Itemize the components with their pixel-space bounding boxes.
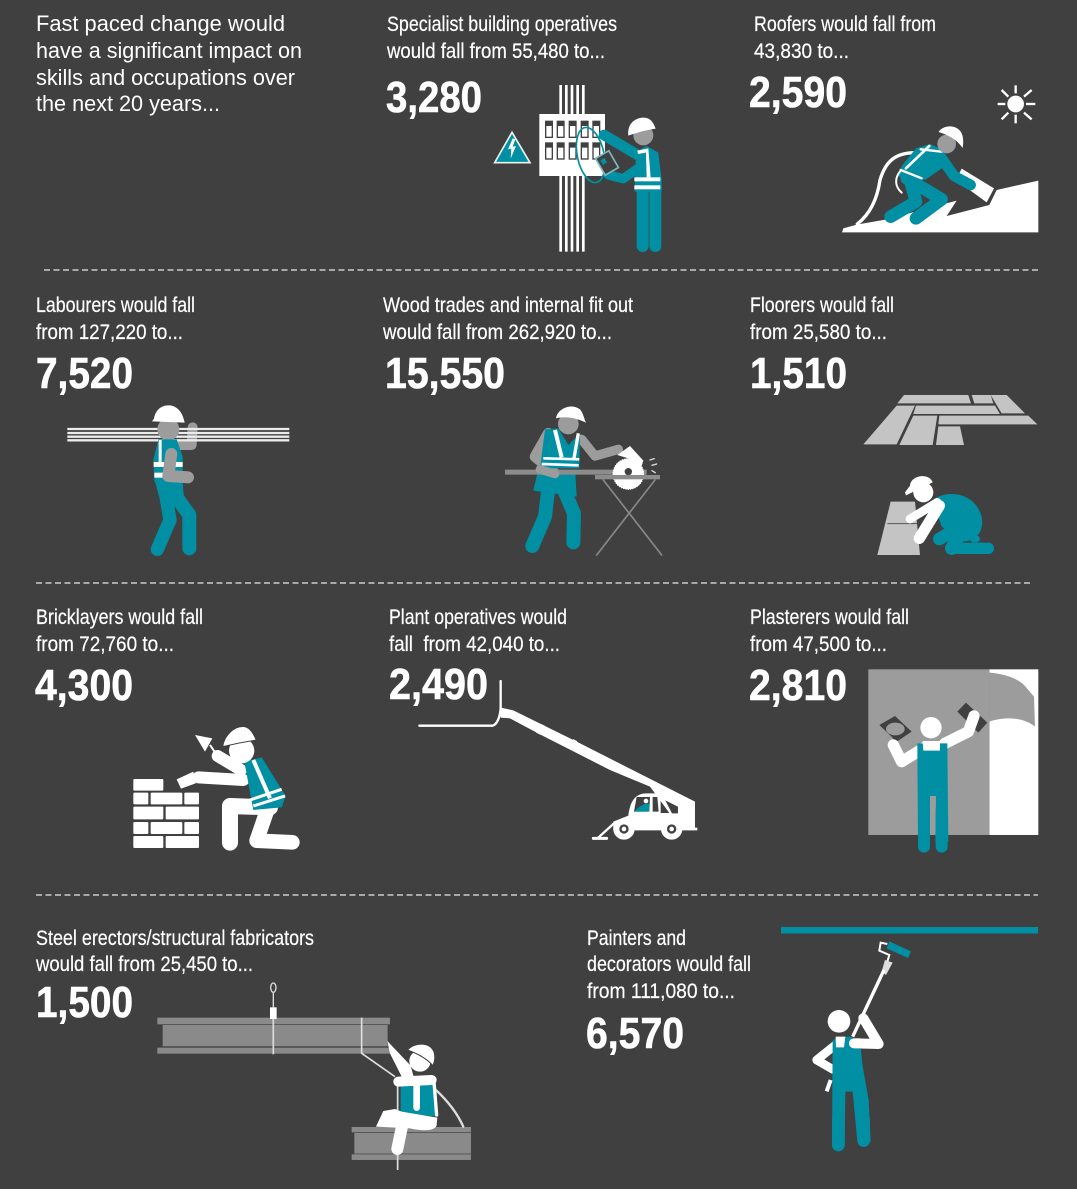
panel: steel erectors <box>35 927 471 1170</box>
heading: wood trades: Wood trades and internal fit out <box>383 294 633 317</box>
heading: roofers: Roofers would fall from <box>754 13 936 36</box>
panel: roofers <box>749 13 1038 232</box>
heading: steel erectors: would fall from 25,450 to... <box>35 953 253 976</box>
heading: plant operatives <box>389 606 567 656</box>
heading: plasterers: from 47,500 to... <box>750 633 887 656</box>
heading: painters and decorators: decorators would fall <box>587 953 751 976</box>
heading: floorers: Floorers would fall <box>750 294 894 317</box>
intro text: skills and occupations over <box>36 65 295 90</box>
panel: wood trades <box>382 294 662 555</box>
panel: specialist building operatives <box>386 13 662 252</box>
icon: sun <box>998 85 1035 123</box>
number: 1,500: 1,500 <box>36 978 133 1027</box>
number: 7,520: 7,520 <box>36 349 133 398</box>
heading: floorers: from 25,580 to... <box>750 321 887 344</box>
number: 1,510: 1,510 <box>750 349 847 398</box>
heading: specialist building operatives <box>386 13 617 63</box>
heading: plant operatives: Plant operatives would <box>389 606 567 629</box>
number: 15,550: 15,550 <box>385 349 505 398</box>
icon: floorer kneeling <box>877 476 988 555</box>
number: 2,490: 2,490 <box>389 660 488 709</box>
icon: painter with roller <box>817 941 911 1147</box>
heading: painters and decorators: Painters and <box>587 927 686 950</box>
panel: labourers <box>36 294 289 549</box>
icon: electrician at panel <box>495 85 662 252</box>
heading: bricklayers: Bricklayers would fall <box>36 606 203 629</box>
icon: floor tiles <box>863 395 1037 445</box>
icon: labourer carrying planks <box>67 405 289 549</box>
icon: bricklayer with wall <box>133 726 292 848</box>
heading: bricklayers: from 72,760 to... <box>36 633 174 656</box>
heading: painters and decorators <box>587 927 751 1003</box>
icon: steel beam and erector <box>157 983 471 1170</box>
icon: carpenter with saw <box>505 406 662 555</box>
icon: plasterer at wall <box>868 669 1038 847</box>
heading: specialist building operatives: Specialist building operatives <box>387 13 617 36</box>
heading: specialist building operatives: would fall from 55,480 to... <box>386 40 605 63</box>
heading: painters and decorators: from 111,080 to... <box>587 980 735 1003</box>
number: 6,570: 6,570 <box>586 1009 684 1058</box>
heading: floorers <box>750 294 894 344</box>
panel: plant operatives <box>389 606 697 840</box>
heading: plasterers: Plasterers would fall <box>750 606 909 629</box>
intro text <box>36 11 302 116</box>
icon: roofer on roof <box>842 126 1038 232</box>
intro text: Fast paced change would <box>36 11 285 36</box>
heading: plant operatives: fall from 42,040 to... <box>389 633 560 656</box>
number: 3,280: 3,280 <box>386 73 482 122</box>
icon: telehandler <box>419 681 697 840</box>
panel: bricklayers <box>35 606 292 848</box>
heading: plasterers <box>750 606 909 656</box>
heading: labourers: Labourers would fall <box>36 294 195 317</box>
heading: steel erectors: Steel erectors/structural fabricators <box>36 927 314 950</box>
heading: steel erectors <box>35 927 314 976</box>
intro text: have a significant impact on <box>36 38 302 63</box>
number: 2,810: 2,810 <box>749 661 847 710</box>
heading: bricklayers <box>36 606 203 656</box>
heading: roofers <box>754 13 936 63</box>
intro text: the next 20 years... <box>36 91 220 116</box>
heading: labourers: from 127,220 to... <box>36 321 183 344</box>
heading: wood trades: would fall from 262,920 to... <box>382 321 612 344</box>
number: 2,590: 2,590 <box>749 68 847 117</box>
panel: floorers <box>750 294 1037 555</box>
heading: labourers <box>36 294 195 344</box>
heading: wood trades <box>382 294 633 344</box>
icon: ceiling bar <box>781 927 1038 934</box>
heading: roofers: 43,830 to... <box>754 40 849 63</box>
panel: painters and decorators <box>586 927 1038 1147</box>
panel: plasterers <box>749 606 1038 847</box>
number: 4,300: 4,300 <box>35 661 133 710</box>
